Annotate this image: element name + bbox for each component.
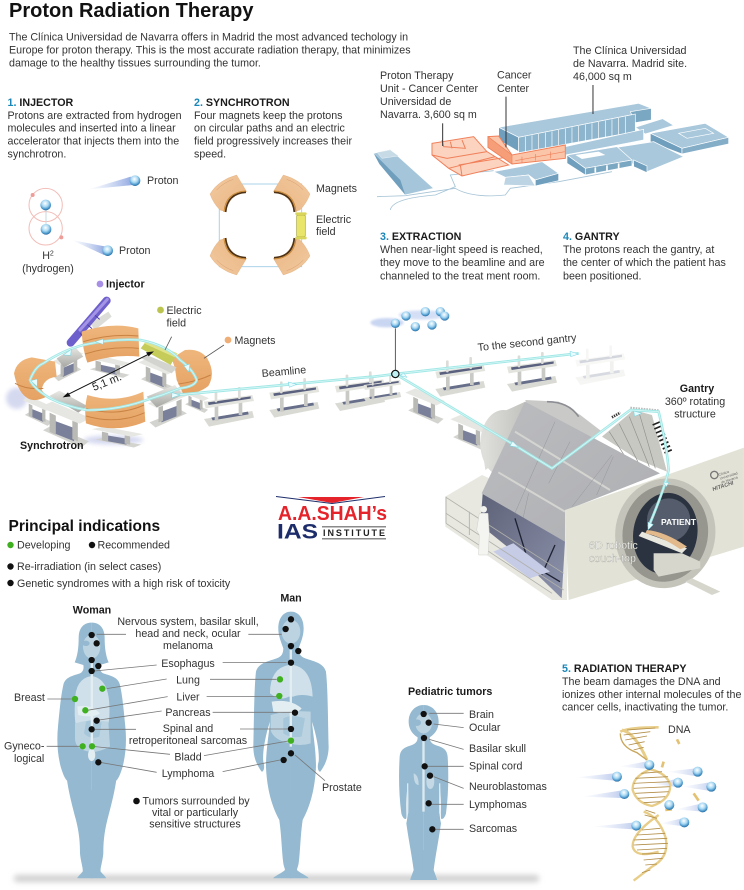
- labels: pediatric tumor types: Ocular: [469, 722, 501, 734]
- labels: indications list: Nervous system, basilar skull,: [117, 616, 259, 628]
- magnet: bottom: [85, 392, 145, 428]
- labels: pediatric tumor types: Spinal cord: [469, 760, 523, 772]
- ground shadow: [14, 875, 539, 882]
- section 1: injector: molecules and inserted into a linear: [8, 123, 176, 135]
- section 3: extraction: 3. EXTRACTION: [380, 231, 461, 243]
- section 4: gantry: 4. GANTRY: [563, 231, 620, 243]
- label: prostate: Prostate: [322, 782, 362, 794]
- labels: pediatric tumor types: Neuroblastomas: [469, 781, 547, 793]
- logo: A.A.Shah's IAS Institute: INSTITUTE: [323, 528, 385, 538]
- proton cluster: [370, 307, 449, 371]
- label: proton top: Proton: [147, 175, 179, 187]
- magnet: left: [14, 357, 57, 400]
- magnet: right: [172, 350, 212, 394]
- rotating structure box: [482, 402, 660, 542]
- second-gantry beam: [369, 353, 579, 377]
- circulating beam: [30, 340, 372, 410]
- label: synchrotron: Synchrotron: [20, 440, 84, 452]
- proton tails: [575, 762, 708, 829]
- labels: indications list: head and neck, ocular: [135, 628, 241, 640]
- label: injector: Injector: [106, 278, 145, 290]
- labels: indications list: Esophagus: [161, 658, 215, 670]
- label: woman: Woman: [73, 604, 111, 616]
- labels: indications list: Liver: [176, 692, 200, 704]
- straight section: right-bottom: [147, 385, 183, 407]
- labels: pediatric tumor types: Lymphomas: [469, 799, 527, 811]
- front wall: [565, 448, 744, 600]
- railing: [446, 497, 564, 593]
- section 5: radiation therapy: The beam damages the DNA and: [562, 676, 721, 688]
- label: gantry: Gantry: [680, 383, 714, 395]
- label: gynecological: logical: [14, 753, 44, 765]
- labels: indications list: retroperitoneal sarcomas: [129, 735, 247, 747]
- labels: indications list: Pancreas: [165, 707, 211, 719]
- lower shadowed frame: [480, 494, 565, 598]
- legend: genetic syndromes: Genetic syndromes with a high risk of toxicity: [17, 578, 231, 590]
- helix middle: [633, 769, 670, 806]
- section 4: gantry: been positioned.: [563, 270, 641, 282]
- legend: recommended: Recommended: [98, 540, 170, 552]
- logo: A.A.Shah's IAS Institute: A.A.SHAH’s: [278, 503, 387, 525]
- section 3: extraction: they move to the beamline and are: [380, 257, 545, 269]
- wall logo text: Clínica: [718, 470, 729, 477]
- label: electric field: Electric: [166, 305, 202, 317]
- magnets diagram: [210, 175, 310, 275]
- section 1: injector: 1. INJECTOR: [8, 97, 73, 109]
- label: couch-top: couch-top: [589, 553, 636, 565]
- label: proton therapy unit: Proton Therapy: [380, 70, 453, 82]
- label: hydrogen: H: [42, 250, 50, 262]
- drum and back structure: [480, 400, 602, 477]
- injector accelerator: [71, 299, 112, 343]
- hydrogen molecule diagram: [29, 175, 140, 256]
- label: proton therapy unit: Universidad de: [380, 96, 451, 108]
- label: madrid site: 46,000 sq m: [573, 71, 632, 83]
- section 4: gantry: The protons reach the gantry, at: [563, 244, 714, 256]
- title: Proton Radiation Therapy: [9, 0, 254, 22]
- labels: indications list: Lymphoma: [162, 768, 214, 780]
- section 2: synchrotron: 2. SYNCHROTRON: [194, 97, 290, 109]
- section 2: synchrotron: speed.: [194, 148, 226, 160]
- label: man: Man: [280, 592, 302, 604]
- note: tumors surrounded: Tumors surrounded by: [142, 796, 250, 808]
- magnet supports: [23, 397, 53, 426]
- legend: developing: Developing: [17, 540, 71, 552]
- label: electric field: field: [316, 226, 336, 238]
- section 4: gantry: the center of which the patient has: [563, 257, 726, 269]
- label: proton therapy unit: Navarra. 3,600 sq m: [380, 109, 477, 121]
- beamline supports left: [204, 387, 254, 427]
- labels: indications list: Lung: [176, 674, 200, 686]
- broken fragments: [662, 739, 699, 810]
- label: proton bottom: Proton: [119, 245, 151, 257]
- label: DNA: DNA: [668, 724, 691, 736]
- labels: pediatric tumor types: Sarcomas: [469, 823, 517, 835]
- label: cancer center: Cancer: [497, 70, 531, 82]
- man markers: [280, 616, 301, 763]
- label: dimension 5,1 m: 5,1 m.: [91, 371, 123, 394]
- label: proton therapy unit: Unit - Cancer Center: [380, 83, 478, 95]
- gantry room illustration: [364, 307, 744, 600]
- gantry beam path: [392, 370, 669, 530]
- heading: pediatric tumors: Pediatric tumors: [408, 686, 492, 698]
- labels: indications list: Bladd: [174, 752, 202, 764]
- labels: indications list: melanoma: [163, 640, 213, 652]
- section 1: injector: Protons are extracted from hydrogen: [8, 110, 182, 122]
- label: gantry: 360º rotating: [665, 396, 725, 408]
- legend: re-irradiation: Re-irradiation (in select cases): [17, 561, 161, 573]
- technician figure: [477, 506, 489, 555]
- label: couch-top: 6D robotic: [589, 540, 638, 552]
- dimension arrow: [63, 351, 154, 397]
- label: gynecological: Gyneco-: [4, 740, 44, 752]
- logo ring on wall: [711, 471, 718, 479]
- label: magnets: Magnets: [316, 183, 357, 195]
- label: hydrogen: 2: [50, 250, 54, 258]
- DNA illustration: [575, 727, 716, 881]
- label: patient: PATIENT: [661, 517, 697, 527]
- label: madrid site: The Clínica Universidad: [573, 45, 686, 57]
- section 2: synchrotron: on circular paths and an electric: [194, 123, 346, 135]
- note: tumors surrounded: sensitive structures: [149, 818, 241, 830]
- section 5: radiation therapy: cancer cells, inactivating the tumor.: [562, 702, 728, 714]
- protons: [612, 760, 716, 831]
- wall logo text: de Navarra: [721, 475, 738, 485]
- rib structure: [602, 408, 669, 472]
- label: to the second gantry: To the second gantry: [477, 332, 578, 354]
- section 1: injector: accelerator that injects them into the: [8, 135, 179, 147]
- labels: pediatric tumor types: Brain: [469, 709, 494, 721]
- intro text: The Clínica Universidad de Navarra offers in Madrid the most advanced techology in: [9, 32, 408, 44]
- figure: man: [253, 612, 329, 878]
- hitachi text: HITACHI: [712, 480, 735, 493]
- section 3: extraction: channeled to the treat ment room.: [380, 270, 540, 282]
- section 2: synchrotron: Four magnets keep the protons: [194, 110, 343, 122]
- man green markers: [276, 676, 294, 744]
- note: tumors surrounded: [133, 796, 250, 830]
- label: electric field: Electric: [316, 214, 351, 226]
- helix top: [620, 727, 659, 760]
- couch with patient: [639, 530, 720, 595]
- label: gantry: structure: [674, 408, 716, 420]
- label: hydrogen: (hydrogen): [22, 263, 74, 275]
- label: magnets: Magnets: [234, 335, 276, 347]
- logo: A.A.Shah's IAS Institute: [276, 496, 387, 544]
- floor: [445, 475, 567, 600]
- intro text: Europe for proton therapy. This is the most accurate radiation therapy, that minimizes: [9, 44, 411, 56]
- gantry ring: [607, 470, 724, 596]
- section 5: radiation therapy: ionizes other internal molecules of the: [562, 689, 741, 701]
- wall logo text: Universidad: [719, 471, 738, 481]
- logo: A.A.Shah's IAS Institute: IAS: [277, 520, 318, 544]
- magnet: top: [82, 326, 139, 363]
- figure: woman: [57, 623, 126, 878]
- labels: indications list: Spinal and: [163, 723, 213, 735]
- section 5: radiation therapy: 5. RADIATION THERAPY: [562, 663, 687, 675]
- note: tumors surrounded: vital or particularly: [152, 807, 239, 819]
- label: breast: Breast: [14, 692, 45, 704]
- section 1: injector: synchrotron.: [8, 148, 66, 160]
- section 3: extraction: When near-light speed is reached,: [380, 244, 543, 256]
- helix bottom: [633, 810, 668, 881]
- building site map: [374, 85, 729, 210]
- figure: pediatric: [399, 705, 464, 880]
- labels: pediatric tumor types: Basilar skull: [469, 743, 526, 755]
- woman markers: [88, 632, 101, 765]
- straight section: left-bottom: [49, 391, 87, 413]
- label: electric field: [157, 305, 202, 330]
- label: madrid site: de Navarra. Madrid site.: [573, 58, 687, 70]
- section 2: synchrotron: field progressively increases their: [194, 135, 352, 147]
- synchrotron ring illustration: [6, 299, 385, 447]
- intro text: damage to the healthy tissues surrounding the tumor.: [9, 58, 261, 70]
- electric field cavity: [141, 341, 177, 365]
- callout lines and markers: woman and man: [47, 616, 325, 781]
- woman green markers: [72, 685, 105, 749]
- label: electric field: field: [166, 318, 186, 330]
- heading: principal indications: Principal indications: [8, 518, 160, 535]
- straight section: left-top: [57, 347, 83, 367]
- label: cancer center: Center: [497, 83, 530, 95]
- label: beamline: Beamline: [261, 364, 307, 380]
